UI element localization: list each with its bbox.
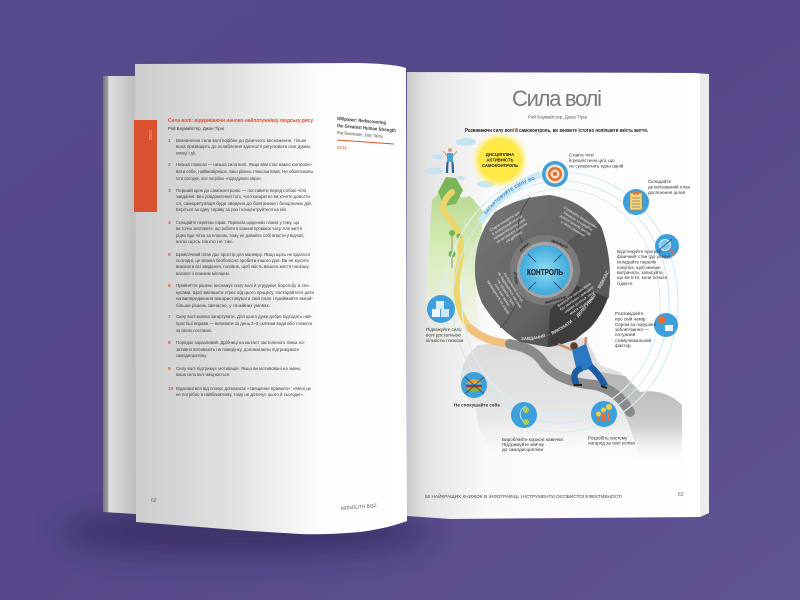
label: rewards: нагород за свої успіхи — [588, 440, 635, 446]
numbered list of tips: самодисципліну. — [176, 353, 207, 358]
section text: top left: не витрачати енергію — [496, 222, 528, 244]
page number 62: 62 — [151, 498, 157, 504]
green mountain — [426, 177, 484, 345]
label: goals — [569, 152, 624, 168]
numbered list of tips: їсти солодке, але потрібно «підгодувати звіра». — [175, 176, 262, 181]
numbered list of tips: 7 — [168, 314, 171, 320]
section text: top left: Ставте конкретні цілі — [489, 210, 521, 232]
trees — [448, 230, 462, 268]
book reference: Willpower: Rediscovering — [337, 116, 386, 126]
section text: top right: у своїх рішеннях — [560, 220, 586, 238]
numbered list of tips: Щомісячний план дає простір для маневру. Якщо щось не вдалося — [176, 251, 311, 257]
numbered list of tips: Силу волі підтримує мотивація. Якщо ви мотивовані на зміни, — [176, 366, 301, 371]
section text: left: не піддавайтеся настрою — [497, 271, 523, 309]
label: goals: й реалістичні цілі, що — [569, 157, 615, 163]
label: announce — [615, 310, 656, 348]
numbered list of tips: емоції і дії. — [176, 150, 196, 156]
label: habits: до самодисципліни — [502, 447, 543, 452]
numbered list of tips: Низька глюкоза — низька сила волі. Якщо вам стає важко контролю- — [176, 162, 312, 167]
numbered list of tips: Прийняття рішень виснажує силу волі й утруднює боротьбу зі спо- — [176, 282, 310, 288]
panel: right page — [407, 72, 700, 519]
label: goals: Ставте чіткі — [569, 152, 594, 158]
numbered list of tips: 10 — [168, 386, 174, 392]
label: announce: Розповідайте — [615, 310, 644, 316]
sun with qualities: ДИСЦИПЛІНА — [486, 152, 514, 157]
numbered list of tips: 2 — [168, 162, 171, 168]
numbered list of tips: вона призводить до ослаблення здатності регулювати свої думки, — [176, 144, 311, 149]
label: rewards: Розробіть систему — [588, 436, 628, 440]
section text: bottom right: маєте на це сили — [569, 296, 595, 316]
numbered list of tips: простіші вправи — випивати за день 2–3 склянки води або стежити — [176, 321, 312, 326]
numbered list of tips: сьогодні, це можна безболісно зробити іншого дня. Ви не мусите — [176, 258, 309, 263]
section text: top right: довгострокову вигоду — [559, 214, 592, 236]
label: announce: зобов'язання — — [615, 327, 649, 332]
ring labels: ІМПУЛЬСИ — [550, 239, 569, 250]
numbered list of tips: Складайте переліки справ. Перевага щоденних планів у тому, що — [176, 219, 299, 225]
section text: top right — [556, 206, 598, 241]
numbered list of tips: більше рішень завчасно, у спокійних умовах. — [176, 302, 270, 308]
section text: top left — [488, 210, 531, 248]
left page stack — [103, 76, 136, 514]
section text: top right: Стримуйте імпульсивні — [563, 206, 598, 230]
label: announce: стимулювальний — [615, 337, 652, 343]
icon: habit loop — [511, 402, 537, 428]
boulder diagram — [474, 195, 610, 347]
label: track progress — [617, 248, 672, 286]
numbered list of tips: на випередження використовувати свій план і приймайте якнай- — [176, 295, 314, 301]
label: glucose: волі достатньою — [426, 332, 461, 338]
orange tab — [134, 120, 157, 212]
numbered list of tips: валася з кожним місяцем. — [176, 271, 230, 276]
numbered list of tips: Силу волі можна загартувати. Для цього дуже добре підходять най- — [176, 313, 312, 319]
icon: target — [542, 161, 568, 187]
ring labels — [513, 239, 569, 305]
sun with qualities: АКТИВНІСТЬ — [487, 158, 513, 162]
grey rocky ground — [461, 338, 682, 462]
core: control: КОНТРОЛЬ — [527, 267, 563, 277]
numbered list of tips: ваша сила волі зміцнюється. — [176, 372, 230, 377]
book shadow — [60, 508, 430, 556]
label: track progress: фізичний стан (до упаду), — [617, 253, 672, 259]
section text: top right: бажання та шукайте — [563, 211, 593, 232]
numbered list of tips — [168, 138, 314, 397]
figure pushing boulder — [558, 337, 607, 388]
label: habits: Виробляйте корисні навички. — [502, 436, 564, 442]
authors: Рой Баумайстер, Джон Тірні — [528, 114, 587, 120]
page number 63: 63 — [678, 492, 684, 498]
control ring — [510, 235, 580, 305]
section text: bottom right: Виконуйте заплановане — [557, 282, 592, 308]
label: plan: Складайте — [648, 178, 671, 184]
boulder wedges — [500, 197, 608, 328]
section text: left: Контролюйте емоції, — [503, 272, 524, 303]
numbered list of tips: 8 — [168, 340, 171, 346]
ring labels: ДУМКИ — [519, 241, 531, 253]
label: rewards — [588, 436, 635, 446]
numbered list of tips: Порядок заразливий. Дрібниці на кшталт застеленого ліжка по- — [176, 339, 305, 345]
section text: bottom right: без зволікань і доводьте — [559, 285, 595, 312]
label: glucose — [426, 326, 464, 343]
book reference: Roy Baumeister, John Tierny — [337, 130, 384, 139]
sun with qualities — [471, 131, 529, 189]
numbered list of tips: 6 — [168, 283, 171, 289]
numbered list of tips: 5 — [168, 252, 171, 258]
label: track progress: що ви їсте, коли почати — [617, 275, 668, 280]
label: announce: Сором за порушені — [615, 322, 656, 327]
icon: magnifier — [655, 234, 679, 258]
icon: glucose cubes — [427, 295, 455, 323]
book reference: 2011 — [337, 145, 347, 150]
label: plan — [648, 178, 691, 195]
label: glucose: кількістю глюкози — [426, 338, 464, 343]
numbered list of tips: Відмовитися від спокус допомагає «священне правило»: «Мені це — [176, 386, 311, 391]
label: track progress: сідаєте — [617, 281, 633, 286]
label: plan: досягнення цілей — [648, 189, 686, 195]
numbered list of tips: не потрібно в найближчому, тому не дотичує цього й сьогодні». — [176, 391, 304, 397]
ring labels: ВИКОНАННЯ — [545, 295, 567, 305]
icon: rewards — [591, 401, 617, 427]
running footer right: 50 НАЙКРАЩИХ КНИЖОК В ІНФОГРАФІЦІ. ІНСТРУМЕНТИ ОСОБИСТОЇ ЕФЕКТИВНОСТІ — [425, 492, 622, 500]
label: glucose: Підкажуйте силу — [426, 326, 462, 332]
section text: top left: й зосереджуйтеся на — [491, 214, 523, 236]
label: goals: не суперечать одна одній — [569, 162, 624, 168]
clouds — [425, 138, 495, 188]
label: announce: фактор — [615, 343, 631, 348]
numbered list of tips: 4 — [168, 220, 171, 226]
left page heading: Сила волі: відкриваючи наново найпотужнішу людську рису — [168, 117, 313, 124]
label: track progress: Відстежуйте прогрес, — [617, 248, 662, 254]
man on the peak — [443, 148, 457, 173]
icon: crossed burger — [461, 372, 487, 398]
section text: left: зосередитися на справі — [486, 280, 510, 315]
arc label: harden willpower: ЗАГАРТОВУЙТЕ СИЛУ ВОЛІ — [484, 176, 534, 214]
section text: left: і не заїдайте стрес, — [496, 278, 516, 307]
winding path — [443, 192, 630, 412]
label: announce: про свій намір. — [615, 316, 647, 322]
label: track progress: витрачати, записуйте, — [617, 269, 664, 275]
numbered list of tips: ся, самореґуляція буде зведена до бовтанини і безцільних дій. — [176, 200, 312, 206]
boulder arc label: ЗАВДАННЯ → ВИКОНАТИ → ДЕЛЕГУВАТИ → ВІДКЛАСТИ — [521, 270, 609, 341]
numbered list of tips: виконати всі завдання, головне, щоб якість вашого життя поліпшу- — [176, 264, 310, 269]
running footer left: MONOLITH BIZZ — [341, 503, 377, 512]
label: track progress: складайте перелік — [617, 258, 657, 264]
numbered list of tips: завдання. Без усвідомлення того, чого конкретно ви хочете домогти- — [176, 194, 311, 199]
section text: bottom right: справи до кінця, коли — [564, 290, 595, 314]
icon: plan checklist — [623, 189, 649, 215]
numbered list of tips: 1 — [168, 138, 171, 144]
label: track progress: покупок, щоб менше — [617, 265, 661, 270]
numbered list of tips: коли щось пішло не так. — [176, 239, 233, 244]
numbered list of tips: 9 — [168, 366, 171, 372]
book reference — [337, 116, 396, 150]
orange tab: 2011 — [148, 130, 153, 140]
label: habits: Підтримуйте звичку — [502, 441, 545, 447]
numbered list of tips: Перший крок до самоконтролю — поставити перед собою чіткі — [176, 187, 306, 193]
section text: bottom right — [557, 282, 600, 319]
numbered list of tips: рідко йде чітко за планом, тому не давайте собі впасти у відчай, — [176, 232, 304, 238]
section text: left: коли вам важко — [493, 283, 511, 307]
section text: top left: на дрібниці — [505, 230, 523, 243]
numbered list of tips: за своєю поставою. — [176, 328, 212, 333]
left page heading — [168, 117, 313, 132]
numbered list of tips: 3 — [168, 188, 171, 194]
numbered list of tips: вати себе, найімовірніше, ваш рівень глюкози впав. Не обов'язково — [176, 168, 313, 174]
ring labels: ЕМОЦІЇ — [513, 272, 519, 284]
label: plan: деталізований план — [648, 184, 691, 190]
left page heading: Рой Баумайстер, Джон Тірні — [168, 125, 224, 132]
sun with qualities: САМОКОНТРОЛЬ — [482, 163, 518, 168]
subtitle: Розвиваючи силу волі й самоконтроль, ви зможете істотно поліпшити якість життя. — [465, 127, 648, 134]
label: habits — [502, 436, 564, 452]
title: Сила волі — [512, 86, 602, 111]
numbered list of tips: Визначення сили волі подібне до фізичного виснаження, тільки — [176, 138, 306, 143]
numbered list of tips: зитивно впливають на поведінку, допомагаючи підтримувати — [176, 347, 299, 352]
label: announce: потужний — [615, 331, 636, 337]
panel: left page — [134, 63, 407, 534]
numbered list of tips: Беріться за одну справу за раз і концентруйтеся на ній. — [176, 206, 287, 212]
section text: left — [485, 269, 527, 316]
numbered list of tips: кусами. Щоб зменшити стрес від цього процесу, постарайтеся дати — [176, 289, 314, 295]
label: temptation: Не спокушайте себе — [454, 402, 500, 408]
book reference: the Greatest Human Strength — [337, 123, 396, 134]
section text: top left: найважливішому, щоб — [493, 218, 526, 241]
core: control — [520, 245, 570, 295]
numbered list of tips: ви точно знатимете, що робити в кожний проміжок часу. Але життя — [176, 225, 303, 231]
concentric blue rings — [444, 172, 678, 432]
right page stack — [695, 73, 709, 517]
icon: speech bubbles — [654, 313, 678, 337]
